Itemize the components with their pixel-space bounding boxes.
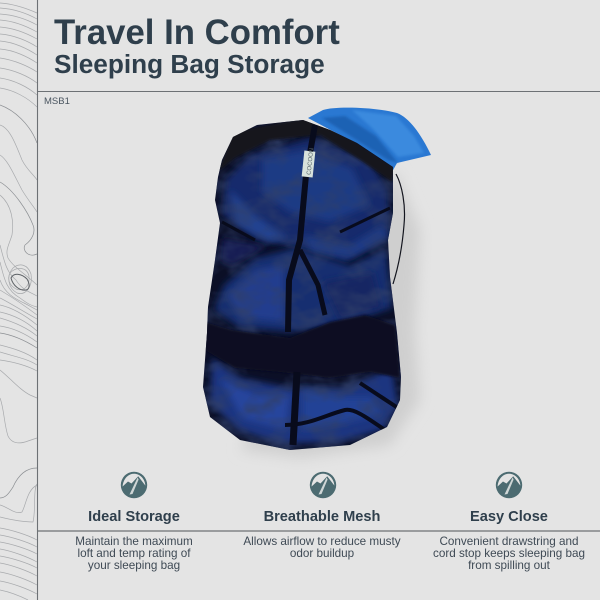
dark mesh band: [205, 315, 400, 378]
description: cord stop keeps sleeping bag: [433, 547, 585, 560]
description: Maintain the maximum: [75, 535, 193, 548]
description: your sleeping bag: [88, 559, 180, 572]
icon: mountain: [310, 472, 336, 498]
bag label tag: COCOON: [307, 148, 315, 175]
description: odor buildup: [290, 547, 355, 560]
mesh bag body: [203, 120, 401, 450]
upper fold: [222, 138, 390, 262]
subtitle: Sleeping Bag Storage: [54, 49, 325, 79]
centre webbing straps: [222, 125, 398, 445]
bag label tag: [302, 148, 315, 178]
wrinkle texture: [203, 120, 401, 450]
heading: Breathable Mesh: [264, 509, 380, 525]
product photo: mesh sleeping bag sack: [195, 108, 431, 458]
dark mesh top rim: [218, 118, 395, 182]
middle fold: [214, 248, 392, 332]
heading: Easy Close: [470, 509, 548, 525]
description: from spilling out: [468, 559, 551, 572]
drawstring cord: [393, 174, 405, 284]
heading: Ideal Storage: [88, 509, 180, 525]
feature: easy close: [433, 472, 585, 572]
title: Travel In Comfort: [54, 14, 340, 52]
description: loft and temp rating of: [77, 547, 191, 560]
product code: MSB1: [44, 96, 70, 107]
icon: mountain: [496, 472, 522, 498]
feature: breathable mesh: [243, 472, 401, 560]
bag shadow: [240, 170, 420, 458]
feature: ideal storage: [75, 472, 193, 572]
topographic contour strip: [0, 3, 37, 600]
lower fold: [210, 358, 398, 444]
blue stuff sack top: [308, 108, 431, 172]
description: Allows airflow to reduce musty: [243, 535, 401, 548]
icon: mountain: [121, 472, 147, 498]
description: Convenient drawstring and: [439, 535, 579, 548]
